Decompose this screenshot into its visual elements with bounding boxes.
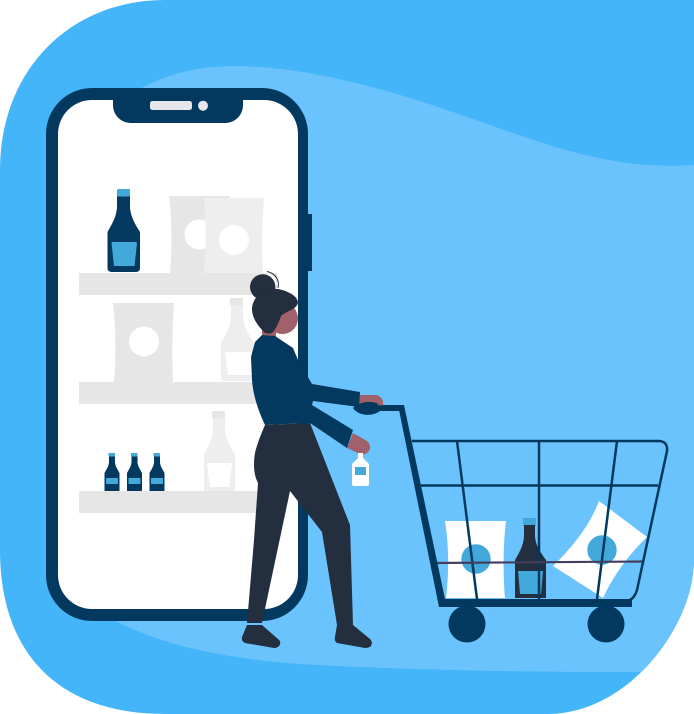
phone body bbox=[46, 88, 308, 621]
cart wheel left bbox=[448, 606, 486, 642]
phone bbox=[46, 88, 312, 621]
cart handle bar bbox=[375, 405, 404, 411]
light chip bag front bbox=[204, 198, 264, 273]
navy bottle on top shelf bbox=[108, 189, 140, 272]
small navy bottle 1 bbox=[104, 453, 120, 491]
torso and arms bbox=[251, 335, 360, 448]
phone camera bbox=[198, 101, 208, 111]
held bottle bbox=[352, 453, 369, 486]
phone notch bbox=[113, 100, 243, 123]
grey chip bag middle shelf bbox=[113, 303, 174, 382]
light wave blob bbox=[110, 66, 694, 672]
small navy bottle 3 bbox=[150, 453, 164, 491]
shopping cart bbox=[375, 405, 667, 642]
phone speaker bbox=[150, 101, 192, 110]
upper hand bbox=[358, 395, 383, 408]
right shoe bbox=[335, 625, 372, 648]
small navy bottle 2 bbox=[127, 453, 142, 491]
hair bbox=[252, 289, 298, 334]
light bottle middle shelf bbox=[221, 298, 254, 381]
white strand bbox=[268, 274, 275, 287]
face bbox=[267, 303, 298, 334]
cart bottle bbox=[515, 518, 546, 598]
cart wire frame bbox=[412, 441, 667, 600]
woman bbox=[242, 272, 383, 648]
cart white bag bbox=[445, 521, 506, 598]
shelves bbox=[79, 273, 277, 513]
cart purple rail bbox=[432, 562, 642, 563]
hair strand bbox=[267, 272, 278, 288]
grey chip bag back bbox=[169, 196, 230, 273]
cart wheel right bbox=[588, 606, 624, 642]
cart main post bbox=[398, 405, 632, 607]
hand grip on handle bbox=[353, 402, 380, 415]
cart tilted bag bbox=[553, 501, 647, 598]
lower hand bbox=[347, 433, 370, 455]
phone side button bbox=[306, 214, 312, 271]
left shoe bbox=[242, 625, 280, 648]
neck bbox=[262, 328, 276, 339]
phone screen bbox=[58, 100, 298, 609]
pants and legs bbox=[247, 423, 353, 625]
light bottle bottom shelf bbox=[204, 411, 235, 491]
hair bun bbox=[250, 274, 275, 300]
